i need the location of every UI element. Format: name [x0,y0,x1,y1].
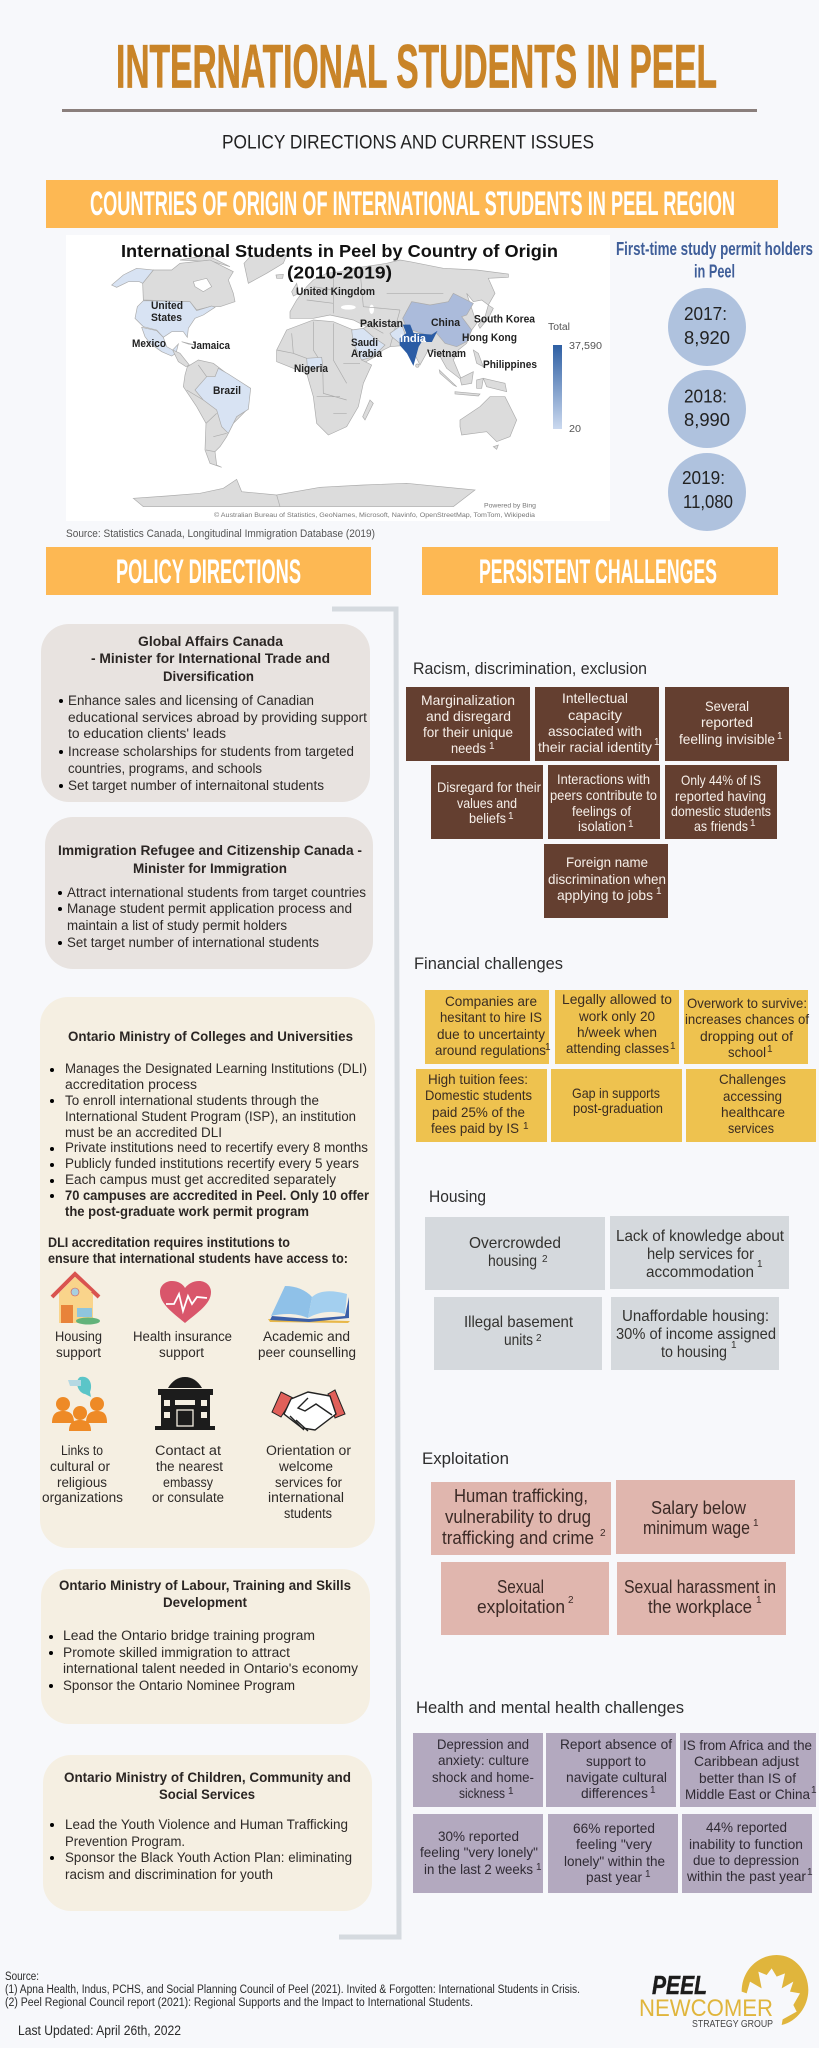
map title: (2010-2019) [287,262,392,282]
label: contact at the nearest embassy or consulate: Contact at [155,1443,221,1458]
panel: racism boxes: isolation [578,818,626,834]
panel: racism boxes: 1 [508,811,514,822]
panel: health boxes: sickness [459,1785,505,1801]
label: orientation or welcome services: Orientation or [266,1443,352,1458]
heading: first-time study permit holders [616,239,813,282]
panel: exploitation boxes [431,1480,795,1635]
map legend [548,322,602,435]
map legend: 37,590 [569,341,602,352]
panel: exploitation boxes: 2 [568,1595,574,1606]
heading: housing: Housing [429,1187,486,1206]
panel: financial boxes: paid 25% of the [432,1104,525,1120]
panel: Ontario Ministry of Children: Social Services [159,1787,255,1802]
map title [121,241,558,282]
panel: health boxes: 1 [650,1785,656,1796]
logo: Peel Newcomer Strategy Group: STRATEGY GROUP [692,2018,773,2030]
map country labels: Jamaica [191,340,231,352]
panel: financial boxes: accessing [723,1088,782,1104]
label: orientation or welcome services [266,1443,352,1521]
label: health insurance support: Health insurance [133,1329,232,1344]
panel: Immigration Refugee and Citizenship Canada: Attract international students from target countries [67,885,366,900]
panel: racism boxes: feelling invisible [679,731,775,747]
panel: housing boxes: Overcrowded [469,1235,561,1252]
panel: housing boxes: Lack of knowledge about [616,1228,785,1245]
panel: racism boxes: applying to jobs [557,887,653,903]
panel: Ontario Ministry of Colleges and Universities: Manages the Designated Learning Institutions (DLI) [65,1061,367,1076]
label: health insurance support [133,1329,232,1360]
panel: health boxes: due to depression [693,1852,799,1868]
panel: health boxes: differences [581,1785,648,1801]
panel: financial boxes: High tuition fees: [428,1071,528,1087]
panel: racism boxes: 1 [777,731,783,742]
map country labels: States [151,312,182,324]
panel: financial boxes: Challenges [719,1071,786,1087]
panel: financial boxes: dropping out of [700,1028,793,1044]
label: orientation or welcome services: students [284,1506,332,1521]
label: health insurance support: support [159,1345,204,1360]
panel: racism boxes: Foreign name [566,854,648,870]
panel: financial boxes: 1 [670,1041,676,1052]
panel: health boxes [413,1733,817,1893]
panel: health boxes: lonely" within the [564,1853,665,1869]
panel: Ontario Ministry of Colleges and Universities: Each campus must get accredited separately [65,1172,336,1187]
panel: health boxes: navigate cultural [566,1769,667,1785]
map country labels: India [400,333,427,345]
panel: Global Affairs Canada: Diversification [163,669,254,684]
panel: exploitation boxes: exploitation [477,1597,565,1617]
panel: racism boxes: needs [451,740,486,756]
panel: racism boxes: their racial identity [538,739,652,755]
panel: health boxes: feeling "very [576,1836,652,1852]
circle: 2019: 2019: [682,468,725,488]
panel: Ontario Ministry of Children: Sponsor the Black Youth Action Plan: eliminating [65,1850,352,1865]
map country labels: Philippines [483,359,537,371]
banner: policy directions: POLICY DIRECTIONS [116,553,301,591]
map legend: 20 [569,424,581,435]
logo: Peel Newcomer Strategy Group: NEWCOMER [639,1995,773,2022]
label: links to cultural or religious organizations: organizations [42,1490,123,1505]
panel: racism boxes: Several [705,698,749,714]
panel: exploitation boxes: 2 [600,1528,606,1539]
panel: Global Affairs Canada: Set target number of internaitonal students [68,778,324,793]
panel: financial boxes: hesitant to hire IS [440,1009,542,1025]
panel: Ontario Ministry of Colleges and Universities: To enroll international students through the [65,1093,319,1108]
panel: exploitation boxes: 1 [756,1595,762,1606]
panel: Immigration Refugee and Citizenship Canada [45,817,373,969]
map country labels: United [151,300,183,312]
panel: racism boxes: for their unique [423,724,513,740]
label: contact at the nearest embassy or consulate: embassy [163,1475,213,1490]
panel: Ontario Ministry of Children: Ontario Ministry of Children, Community and [64,1770,351,1785]
panel: financial boxes: Legally allowed to [562,991,672,1007]
icon: heart [160,1281,211,1323]
sources [5,1971,580,2009]
panel: exploitation boxes: 1 [753,1518,759,1529]
panel: health boxes: IS from Africa and the [683,1737,812,1753]
panel: financial boxes: 1 [767,1044,773,1055]
panel: health boxes: 1 [811,1785,817,1796]
panel: financial boxes: attending classes [566,1040,669,1056]
panel: racism boxes: 1 [628,819,634,830]
panel: racism boxes: 1 [656,886,662,897]
circle: 2019 [668,453,746,531]
sources: (1) Apna Health, Indus, PCHS, and Social Planning Council of Peel (2021). Invited & Forgotten: International Students in Crisis. [5,1984,580,1996]
panel: health boxes: shock and home- [432,1769,534,1785]
subtitle: POLICY DIRECTIONS AND CURRENT ISSUES [222,132,594,154]
panel: Global Affairs Canada: Enhance sales and licensing of Canadian [68,693,314,708]
heading: exploitation: Exploitation [422,1449,509,1468]
panel: Immigration Refugee and Citizenship Canada: Minister for Immigration [133,861,287,876]
panel: racism boxes [406,687,789,918]
panel: health boxes: Caribbean adjust [694,1753,799,1769]
panel: financial boxes: services [728,1120,774,1136]
panel: Ontario Ministry of Children: racism and discrimination for youth [65,1867,273,1882]
panel: financial boxes: Overwork to survive: [687,995,807,1011]
panel: housing boxes: 1 [731,1340,737,1351]
panel: health boxes: Report absence of [560,1736,672,1752]
panel: exploitation boxes: Salary below [651,1498,747,1518]
panel: Global Affairs Canada: educational services abroad by providing support [68,710,367,725]
panel: health boxes: inability to function [689,1836,803,1852]
panel: racism boxes: 1 [654,737,660,748]
map legend: Total [548,322,570,333]
panel: Immigration Refugee and Citizenship Canada: maintain a list of study permit holders [67,918,287,933]
panel: health boxes: Middle East or China [685,1786,810,1802]
label: links to cultural or religious organizations [42,1443,123,1505]
sources: Source: [5,1971,39,1983]
map country labels: Nigeria [294,363,329,375]
panel: Global Affairs Canada: to education clients' leads [68,726,226,741]
label: academic and peer counselling: peer counselling [258,1345,356,1360]
panel: exploitation boxes: Sexual harassment in [624,1577,776,1597]
panel: Ontario Ministry of Labour: Sponsor the Ontario Nominee Program [63,1678,295,1693]
panel: racism boxes: Marginalization [421,692,515,708]
map country labels: Hong Kong [462,332,517,344]
panel: financial boxes: Gap in supports [572,1085,660,1101]
panel: health boxes: better than IS of [699,1770,796,1786]
panel: racism boxes: beliefs [469,810,506,826]
panel: health boxes: 66% reported [573,1820,655,1836]
panel: financial boxes: fees paid by IS [431,1120,519,1136]
logo: Peel Newcomer Strategy Group [639,1955,808,2030]
icon: embassy [155,1377,215,1430]
panel: racism boxes: domestic students [671,803,771,819]
circle: 2018 [668,370,746,448]
panel: exploitation boxes: trafficking and crime [442,1528,594,1548]
circle: 2017 [668,288,746,366]
panel: Ontario Ministry of Labour [41,1569,370,1724]
map country labels: China [431,317,461,329]
panel: racism boxes: Disregard for their [437,779,541,795]
map country labels [132,286,537,397]
panel: financial boxes: post-graduation [573,1100,663,1116]
panel: health boxes: 1 [508,1786,514,1797]
panel: Global Affairs Canada: Increase scholarships for students from targeted [68,744,354,759]
panel: health boxes: 44% reported [706,1819,787,1835]
circle: 2017: 8,920 [684,328,730,348]
panel: health boxes: feeling "very lonely" [420,1844,538,1860]
panel: Global Affairs Canada: - Minister for International Trade and [91,651,330,666]
label: contact at the nearest embassy or consulate [152,1443,224,1505]
panel: Ontario Ministry of Children: Prevention Program. [65,1834,185,1849]
panel: Global Affairs Canada [41,624,370,802]
panel: Ontario Ministry of Colleges and Universities: accreditation process [65,1077,197,1092]
panel: Ontario Ministry of Colleges and Universities: Publicly funded institutions recertify every 5 years [65,1156,359,1171]
panel: Global Affairs Canada: countries, programs, and schools [68,761,262,776]
map country labels: Arabia [351,348,383,360]
icon: house [52,1274,100,1324]
map country labels: United Kingdom [296,286,375,298]
panel: financial boxes: Domestic students [425,1087,532,1103]
label: housing support [55,1329,102,1360]
panel: financial boxes: around regulations [435,1042,546,1058]
panel: racism boxes: 1 [489,741,495,752]
panel: racism boxes: values and [457,795,517,811]
panel: housing boxes: Illegal basement [464,1314,574,1331]
panel: housing boxes: housing [488,1253,537,1270]
panel: financial boxes [416,990,816,1142]
heading: financial challenges: Financial challenges [414,954,563,973]
map country labels: Vietnam [427,348,466,360]
label: housing support: support [56,1345,101,1360]
label: contact at the nearest embassy or consulate: the nearest [156,1459,223,1474]
panel: exploitation boxes: the workplace [648,1597,752,1617]
banner: policy directions [46,547,371,595]
label: housing support: Housing [55,1329,102,1344]
map country labels: Brazil [213,385,241,397]
panel: racism boxes: Intellectual [562,690,628,706]
panel: housing boxes: 2 [542,1254,548,1265]
panel: racism boxes: reported [701,714,753,730]
panel: housing boxes: 2 [536,1333,542,1344]
icon: people [52,1377,107,1431]
panel: housing boxes: 30% of income assigned [616,1326,776,1343]
label: academic and peer counselling: Academic and [263,1329,350,1344]
map credits: © Australian Bureau of Statistics, GeoNames, Microsoft, Navinfo, OpenStreetMap, TomTom, Wikipedia [214,511,535,519]
panel: racism boxes: as friends [694,818,748,834]
logo: Peel Newcomer Strategy Group: PEEL [652,1970,707,2000]
label: orientation or welcome services: services for [275,1475,342,1490]
panel: health boxes: 30% reported [438,1828,519,1844]
panel: health boxes: 1 [645,1869,651,1880]
panel: housing boxes [425,1216,789,1370]
panel: Ontario Ministry of Labour: international talent needed in Ontario's economy [63,1661,358,1676]
panel: financial boxes: 1 [523,1121,529,1132]
panel: housing boxes: to housing [661,1344,727,1361]
label: links to cultural or religious organizations: cultural or [50,1459,111,1474]
panel: racism boxes: Interactions with [557,771,650,787]
label: orientation or welcome services: international [268,1490,344,1505]
circle: 2018: 2018: [684,386,727,406]
panel: financial boxes: h/week when [577,1024,657,1040]
panel: Ontario Ministry of Colleges and Universities: must be an accredited DLI [65,1125,222,1140]
panel: exploitation boxes: minimum wage [643,1518,750,1538]
panel: housing boxes: 1 [757,1259,763,1270]
panel: racism boxes: reported having [675,788,766,804]
panel: exploitation boxes: Human trafficking, [454,1486,588,1506]
panel: health boxes: within the past year [686,1868,806,1884]
map credits: Powered by Bing [484,502,536,510]
panel: Immigration Refugee and Citizenship Canada: Set target number of international students [67,935,319,950]
panel: racism boxes: capacity [568,707,622,723]
panel: financial boxes: 1 [545,1042,551,1053]
map land [112,255,517,507]
panel: health boxes: support to [586,1753,646,1769]
panel: financial boxes: school [728,1044,766,1060]
panel: health boxes: anxiety: culture [438,1752,529,1768]
panel: world map [66,235,610,521]
map country labels: Pakistan [360,318,403,330]
panel: health boxes: 1 [536,1862,542,1873]
panel: housing boxes: help services for [647,1246,755,1263]
panel: health boxes: 1 [807,1867,813,1878]
panel: Ontario Ministry of Colleges and Universities: the post-graduate work permit program [65,1204,309,1219]
panel: health boxes: past year [586,1869,642,1885]
heading: first-time study permit holders: in Peel [694,262,735,282]
panel: exploitation boxes: vulnerability to drug [445,1507,591,1527]
panel: racism boxes: Only 44% of IS [681,772,761,788]
map source: Source: Statistics Canada, Longitudinal Immigration Database (2019) [66,528,375,540]
panel: housing boxes: units [504,1332,533,1349]
panel: Ontario Ministry of Labour: Development [163,1595,247,1610]
panel: housing boxes: Unaffordable housing: [622,1308,769,1325]
panel: health boxes: in the last 2 weeks [424,1861,533,1877]
label: links to cultural or religious organizations: Links to [61,1443,103,1458]
panel: racism boxes: peers contribute to [550,787,657,803]
panel: Ontario Ministry of Colleges and Universities [40,997,375,1548]
panel: Immigration Refugee and Citizenship Canada: Immigration Refugee and Citizenship Canada - [58,843,362,858]
panel: Ontario Ministry of Colleges and Universities: 70 campuses are accredited in Peel. Only 10 offer [65,1188,370,1203]
panel: racism boxes: and disregard [426,708,511,724]
panel: exploitation boxes: Sexual [497,1577,544,1597]
panel: financial boxes: increases chances of [685,1011,809,1027]
panel: Ontario Ministry of Labour: Promote skilled immigration to attract [63,1645,290,1660]
map country labels: Saudi [351,337,378,349]
panel: financial boxes: work only 20 [578,1008,655,1024]
last updated: Last Updated: April 26th, 2022 [18,2023,181,2038]
label: contact at the nearest embassy or consulate: or consulate [152,1490,224,1505]
panel: Ontario Ministry of Colleges and Universities: ensure that international students have access to: [48,1251,348,1266]
sources: (2) Peel Regional Council report (2021): Regional Supports and the Impact to International Students. [5,1997,473,2009]
circle: 2017: 2017: [684,304,727,324]
panel: racism boxes: associated with [548,723,642,739]
heading: racism: Racism, discrimination, exclusion [413,659,647,678]
map country labels: Mexico [132,338,166,350]
panel: Ontario Ministry of Colleges and Universities: International Student Program (ISP), an institution [65,1109,356,1124]
panel: Ontario Ministry of Colleges and Universities: Private institutions need to recertify every 8 months [65,1140,368,1155]
label: academic and peer counselling [258,1329,356,1360]
panel: Ontario Ministry of Labour: Ontario Ministry of Labour, Training and Skills [59,1578,351,1593]
panel: financial boxes: due to uncertainty [437,1026,545,1042]
icon: handshake [272,1390,345,1431]
panel: Ontario Ministry of Children: Lead the Youth Violence and Human Trafficking [65,1817,348,1832]
panel: Global Affairs Canada: Global Affairs Canada [138,634,284,649]
panel: Ontario Ministry of Colleges and Universities: Ontario Ministry of Colleges and Universities [68,1029,353,1044]
panel: racism boxes: 1 [750,818,756,829]
panel: health boxes: Depression and [437,1736,529,1752]
panel: Immigration Refugee and Citizenship Canada: Manage student permit application process and [67,901,352,916]
panel: Ontario Ministry of Labour: Lead the Ontario bridge training program [63,1628,315,1643]
panel: Ontario Ministry of Children [43,1755,372,1911]
map country labels: South Korea [474,314,536,326]
panel: financial boxes: healthcare [721,1104,785,1120]
panel: housing boxes: accommodation [646,1264,754,1281]
label: orientation or welcome services: welcome [278,1459,333,1474]
circle: 2019: 11,080 [683,492,733,512]
panel: Ontario Ministry of Colleges and Universities: DLI accreditation requires institutions to [48,1235,290,1250]
circle: 2018: 8,990 [684,410,730,430]
panel: racism boxes: feelings of [572,803,631,819]
map credits [214,502,536,519]
map title: International Students in Peel by Country of Origin [121,241,558,261]
panel: racism boxes: discrimination when [548,871,666,887]
banner: persistent challenges [422,547,778,595]
heading: health: Health and mental health challenges [416,1698,684,1717]
panel: financial boxes: Companies are [445,993,537,1009]
icon: book [268,1286,350,1323]
label: links to cultural or religious organizations: religious [57,1475,107,1490]
